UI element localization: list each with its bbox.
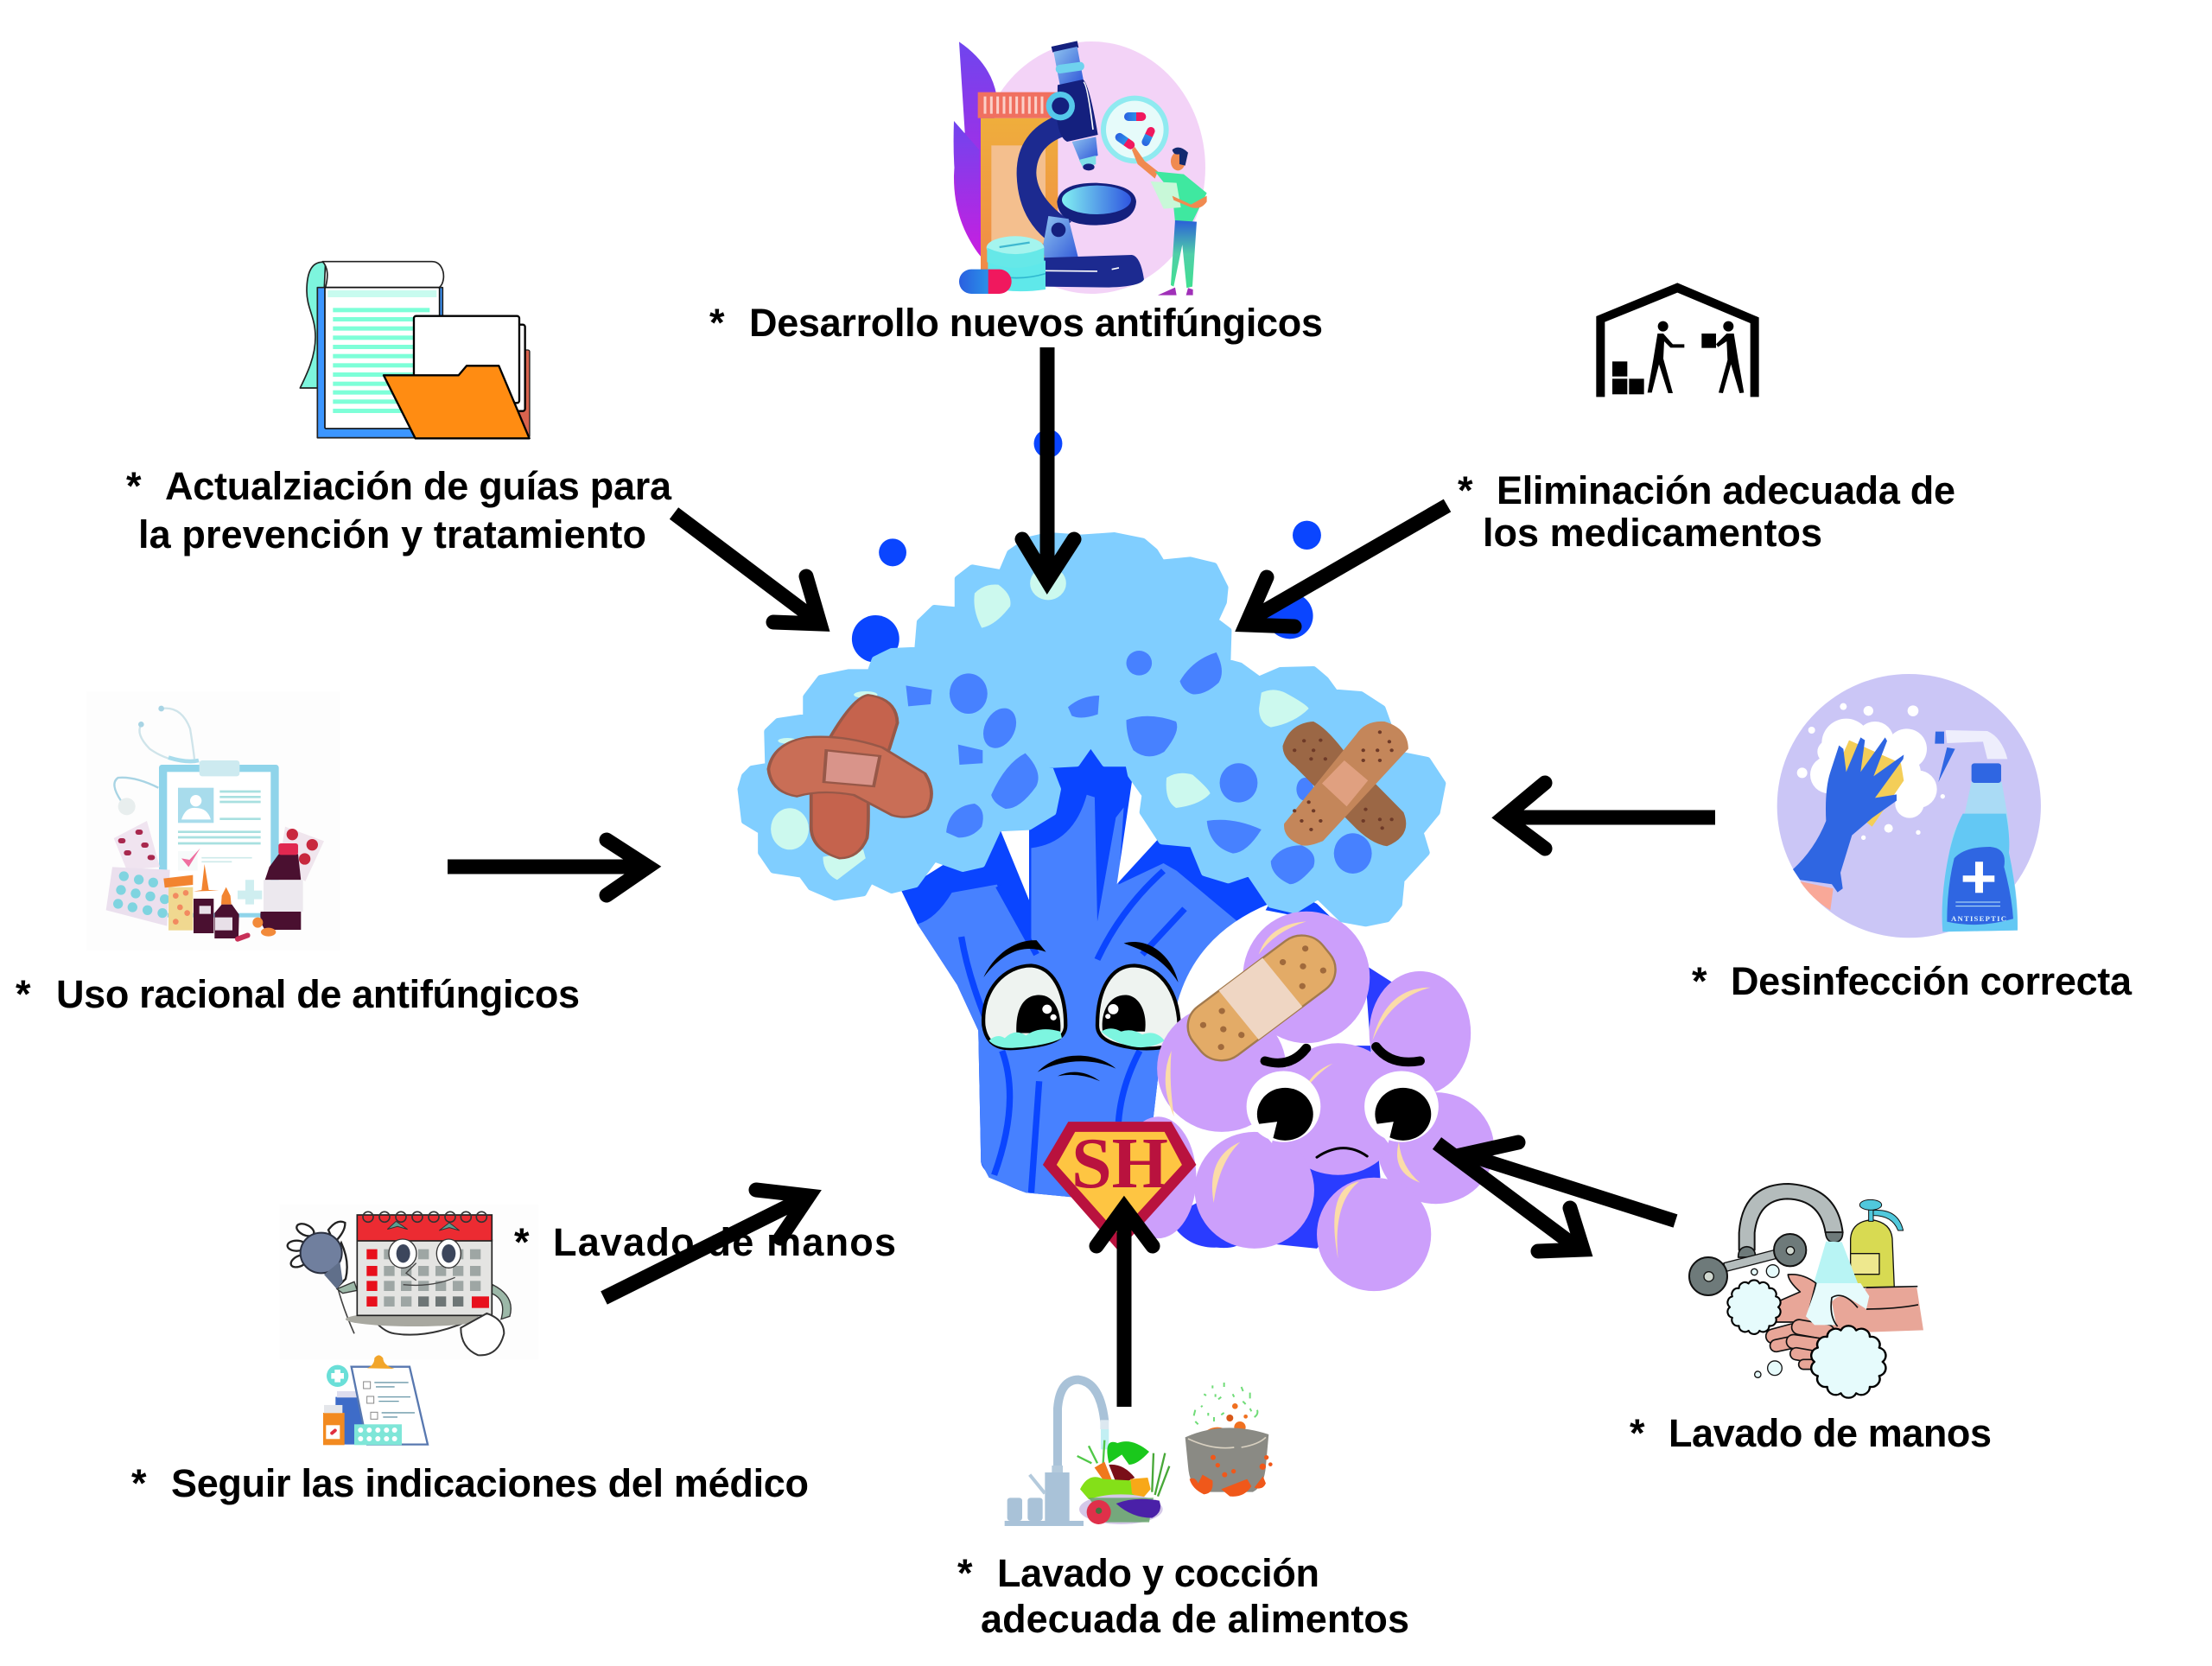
- arrow: bottom: [1096, 1208, 1153, 1407]
- heading: Actualziación de guías: Actualziación de guías para: [165, 464, 672, 508]
- heading: Seguir las indicaciones: *: [131, 1461, 147, 1505]
- broccoli-shaped fungus stem: [901, 741, 1338, 1198]
- heading: Actualziación de guías: [126, 464, 672, 556]
- heading: Lavado y cocción: [957, 1551, 1409, 1641]
- heading: Desarrollo nuevos antifúngicos: *: [709, 301, 725, 345]
- arrow: top: [1022, 347, 1074, 581]
- vegetable bowl: [1077, 1440, 1169, 1524]
- arrow: lower right double: [1437, 1142, 1675, 1251]
- heading: Desarrollo nuevos antifúngicos: Desarrollo nuevos antifúngicos: [749, 301, 1323, 345]
- hands: [1764, 1275, 1923, 1370]
- crown highlights: [771, 567, 1309, 880]
- arrow: upper right: [1246, 506, 1447, 626]
- heading: Lavado y cocción: Lavado y cocción: [997, 1551, 1319, 1595]
- stethoscope: [114, 709, 194, 801]
- faucet: [1005, 1380, 1109, 1526]
- heading: Eliminación adecuada: los medicamentos: [1483, 511, 1822, 555]
- heading: Desinfección correcta: *: [1692, 959, 1707, 1003]
- hand with chest piece: [288, 1221, 347, 1288]
- heading: Uso racional de antifúngicos: Uso racional de antifúngicos: [56, 972, 580, 1016]
- shield letters SH: SH: [1071, 1123, 1168, 1204]
- arrow: upper left: [674, 513, 820, 624]
- bandage on right of crown: [1282, 722, 1408, 846]
- floating spores: [852, 429, 1321, 663]
- arrow: left: [448, 840, 648, 895]
- icon: warehouse with workers: [1596, 283, 1759, 397]
- small clipboard: [327, 1365, 348, 1387]
- heading: Lavado de manos, right: Lavado de manos: [1669, 1411, 1992, 1455]
- icon: calendar doctor mascot: [279, 1204, 538, 1445]
- heading: Actualziación de guías: *: [126, 464, 142, 508]
- bandage on purple fungus: [1177, 925, 1346, 1071]
- cooking pot: [1185, 1383, 1273, 1497]
- crown spots: [906, 651, 1372, 884]
- heading: Eliminación adecuada: [1458, 468, 1955, 555]
- heading: Lavado de manos, left: Lavado de manos: [553, 1220, 896, 1264]
- heading: Lavado de manos, right: *: [1630, 1411, 1645, 1455]
- arrow: lower left: [604, 1190, 809, 1298]
- face of purple fungus: [1247, 1046, 1439, 1157]
- heading: Actualziación de guías: la prevención y tratamiento: [138, 512, 646, 556]
- scientist: [1132, 147, 1207, 296]
- icon: faucet with vegetables and cooking pot: [1005, 1380, 1273, 1526]
- icon: clinical guidelines and folder: [300, 262, 530, 438]
- heading: Uso racional de antifúngicos: *: [16, 972, 31, 1016]
- heading: Lavado de manos, left: *: [514, 1220, 530, 1264]
- icon: clipboard with medicines: [86, 691, 340, 951]
- pill blisters: [114, 821, 160, 870]
- heading: Lavado y cocción: adecuada de alimentos: [981, 1597, 1409, 1641]
- heading: Eliminación adecuada: *: [1458, 468, 1473, 512]
- bottles: [168, 887, 193, 931]
- purple grape-shaped fungus: [1120, 912, 1494, 1291]
- heading: Lavado y cocción: *: [957, 1551, 973, 1595]
- fungus crown: [741, 536, 1442, 923]
- icon: gloved hand with antiseptic spray: [1777, 674, 2041, 938]
- heading: Desinfección correcta: Desinfección correcta: [1731, 959, 2133, 1003]
- foam cluster large: [1811, 1326, 1885, 1398]
- icon: gloved hand with antiseptic spray: ANTISEPTIC: [1951, 914, 2006, 923]
- icon: hand washing: [1689, 1184, 1923, 1398]
- face of blue fungus: [983, 940, 1179, 1081]
- heading: Eliminación adecuada: Eliminación adecuada de: [1497, 468, 1955, 512]
- heading: Seguir las indicaciones: Seguir las indicaciones del médico: [171, 1461, 809, 1505]
- shield: [1043, 1122, 1196, 1251]
- icon: microscope and antifungal research: [954, 41, 1207, 296]
- arrow: right: [1503, 783, 1715, 849]
- foam cluster small: [1727, 1280, 1781, 1334]
- bandage on left of crown: [768, 695, 931, 858]
- central illustration: sad fungus characters: [741, 429, 1494, 1291]
